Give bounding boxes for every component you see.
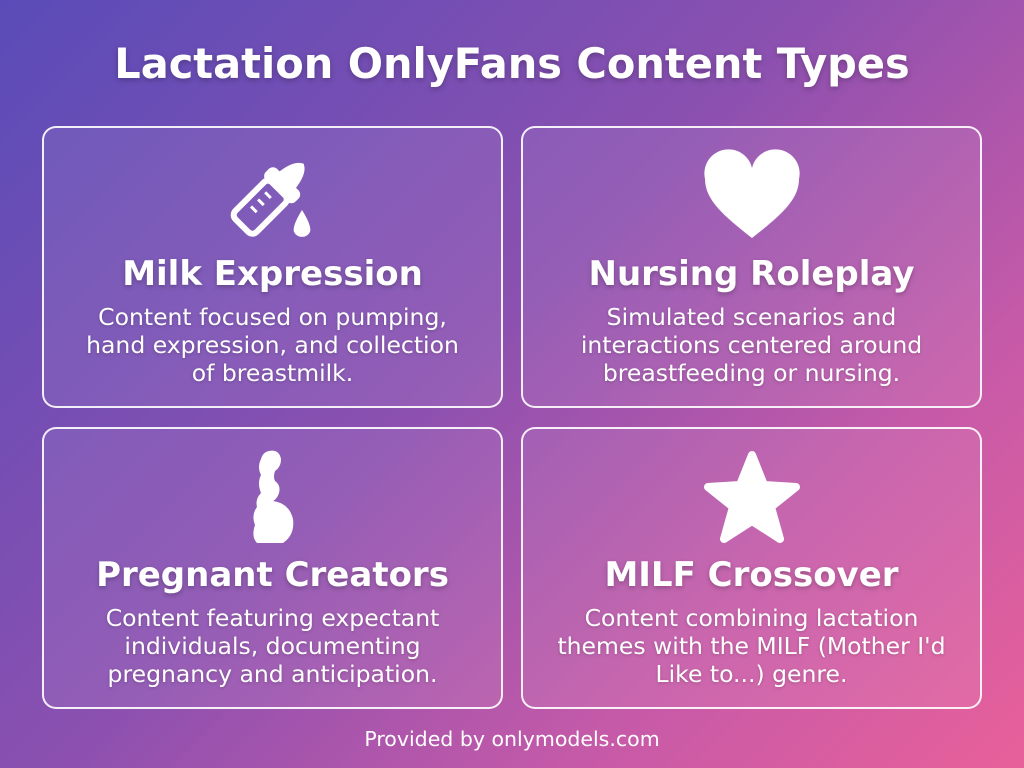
text: breastfeeding or nursing. [603,359,900,387]
heading: Nursing Roleplay [588,254,914,294]
panel: pregnant creators [42,427,503,709]
text: Content focused on pumping, [98,303,447,331]
text: Simulated scenarios and [607,303,896,331]
text: Content featuring expectant [106,604,439,632]
panel: milf crossover [521,427,982,709]
text: hand expression, and collection [86,331,459,359]
text: themes with the MILF (Mother I'd [557,632,946,660]
panel: milk expression [42,126,503,408]
text [106,604,439,689]
text [581,303,922,388]
text: Like to...) genre. [656,660,847,688]
icon: star [704,451,800,543]
panel: nursing roleplay [521,126,982,408]
footer: Provided by onlymodels.com [364,727,660,751]
heading: MILF Crossover [604,555,899,595]
text: of breastmilk. [192,359,353,387]
text: individuals, documenting [124,632,421,660]
text [86,303,459,387]
title: Lactation OnlyFans Content Types [114,39,910,88]
text: Content combining lactation [585,604,918,632]
text [557,604,946,689]
text: pregnancy and anticipation. [108,660,437,688]
icon: pregnant silhouette [253,450,294,543]
icon: baby bottle [230,162,310,237]
heading: Milk Expression [122,254,423,294]
text: interactions centered around [581,331,922,359]
icon: heart [704,149,800,238]
heading: Pregnant Creators [96,555,449,595]
